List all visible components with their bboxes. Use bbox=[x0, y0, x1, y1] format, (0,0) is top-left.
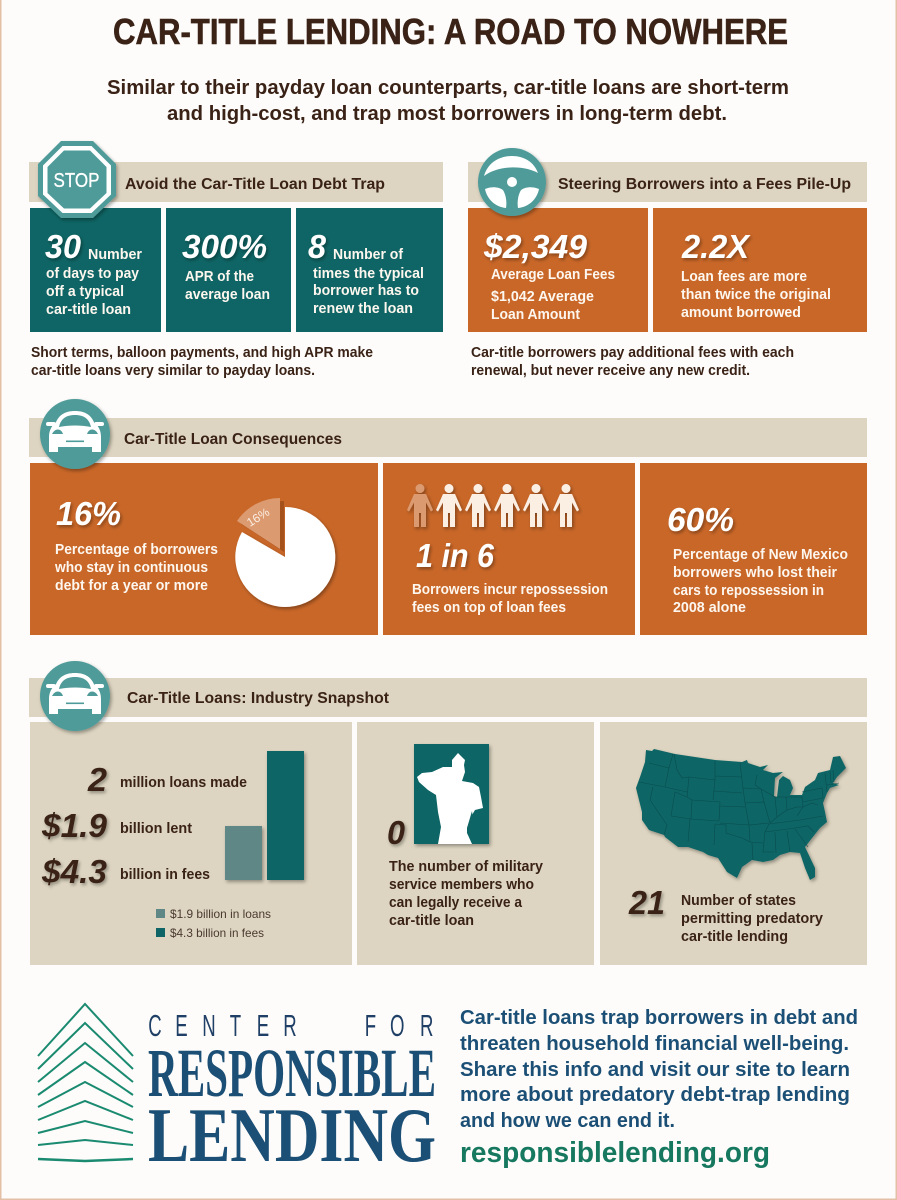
logo wordmark bbox=[148, 1009, 436, 1178]
logo: Center for Responsible Lending bbox=[38, 1004, 436, 1178]
chart legend: $1.9 billion in loans bbox=[170, 907, 271, 921]
bar chart bbox=[225, 751, 304, 880]
stat: 1.9 billion lent: $1.9 bbox=[41, 807, 108, 844]
stats card with bar chart bbox=[30, 722, 352, 965]
heading band: avoid the trap bbox=[29, 162, 443, 202]
stat: 2 million loans: 2 bbox=[87, 761, 108, 798]
note: short terms: car-title loans very similar to payday loans. bbox=[31, 363, 315, 379]
note: additional fees: Car-title borrowers pay additional fees with each bbox=[471, 345, 794, 361]
call to action text: Share this info and visit our site to learn bbox=[460, 1059, 850, 1081]
states caption: Number of states bbox=[681, 893, 796, 909]
stat box: average loan fees: Loan Amount bbox=[491, 307, 580, 323]
icon: stop sign bbox=[38, 141, 116, 218]
stat box: 8 renewals: Number of bbox=[333, 247, 403, 263]
note: short terms bbox=[31, 345, 373, 379]
icon: car badge, consequences bbox=[40, 399, 110, 469]
stat box: 2.2X: Loan fees are more bbox=[681, 269, 807, 285]
stat box: 8 renewals bbox=[296, 208, 443, 332]
subtitle: and high-cost, and trap most borrowers in long-term debt. bbox=[167, 102, 727, 125]
icon: steering wheel bbox=[478, 148, 546, 216]
states card bbox=[600, 722, 867, 965]
military caption: can legally receive a bbox=[389, 895, 523, 911]
stat box: 16 percent: Percentage of borrowers bbox=[55, 542, 218, 558]
stat box: 1 in 6: Borrowers incur repossession bbox=[412, 582, 608, 598]
stat box: 30 days: Number bbox=[88, 247, 142, 263]
panel: consequences bbox=[29, 399, 867, 635]
stat box: 16 percent: 16% bbox=[56, 495, 121, 532]
heading band: steering bbox=[468, 162, 867, 202]
states caption bbox=[681, 893, 823, 945]
stat box: 1 in 6: fees on top of loan fees bbox=[412, 600, 566, 616]
stat box: 8 renewals: borrower has to bbox=[313, 283, 419, 299]
military card: 0 bbox=[387, 814, 406, 851]
pie chart: 16 percent: 16% bbox=[244, 505, 272, 530]
panel: avoid the debt trap bbox=[29, 141, 443, 379]
stat: 1.9 billion lent bbox=[41, 807, 192, 844]
stat box: 60 percent: 60% bbox=[667, 501, 734, 538]
stat box: 60 percent: cars to repossession in bbox=[673, 583, 824, 599]
stat: 4.3 billion fees: $4.3 bbox=[41, 853, 107, 890]
states caption: car-title lending bbox=[681, 929, 788, 945]
note: additional fees: renewal, but never receive any new credit. bbox=[471, 363, 750, 379]
states caption: permitting predatory bbox=[681, 911, 823, 927]
states card: 21 bbox=[628, 884, 665, 921]
heading band: snapshot: Car-Title Loans: Industry Snapshot bbox=[127, 690, 390, 707]
call to action text: and how we can end it. bbox=[460, 1110, 675, 1132]
call to action text: threaten household financial well-being. bbox=[460, 1033, 849, 1055]
stat box: 60 percent bbox=[640, 463, 867, 635]
stat box: 30 days bbox=[30, 208, 161, 332]
military card bbox=[357, 722, 594, 965]
stat box: 300% APR: APR of the bbox=[185, 269, 254, 285]
military caption bbox=[389, 859, 543, 929]
stat box: 2.2X: amount borrowed bbox=[681, 305, 801, 321]
military caption: service members who bbox=[389, 877, 534, 893]
panel: industry snapshot bbox=[29, 661, 867, 965]
icon: chevron building bbox=[38, 1004, 133, 1161]
pie chart: 16 percent bbox=[235, 498, 335, 607]
call to action text: more about predatory debt-trap lending bbox=[460, 1084, 850, 1106]
stat box: 16 percent: who stay in continuous bbox=[54, 560, 208, 576]
logo wordmark: CENTER FOR bbox=[148, 1009, 433, 1043]
heading band: consequences: Car-Title Loan Consequences bbox=[124, 431, 342, 448]
call to action text bbox=[460, 1007, 858, 1132]
stat box: 300% APR: average loan bbox=[185, 287, 270, 303]
subtitle bbox=[107, 76, 789, 125]
icon: saluting soldier bbox=[414, 744, 489, 844]
stat box: 1 in 6: 1 in 6 bbox=[416, 537, 495, 574]
website link: responsiblelending.org bbox=[460, 1137, 770, 1169]
call to action text: Car-title loans trap borrowers in debt and bbox=[460, 1007, 858, 1029]
stat box: average loan fees: $2,349 bbox=[483, 228, 588, 265]
stat box: 30 days: off a typical bbox=[46, 284, 124, 300]
heading band: steering: Steering Borrowers into a Fees Pile-Up bbox=[558, 176, 851, 193]
icon: car badge, snapshot bbox=[40, 661, 110, 731]
stat box: average loan fees: Average Loan Fees bbox=[491, 267, 615, 283]
stat box: 60 percent: Percentage of New Mexico bbox=[673, 547, 848, 563]
map of the United States bbox=[636, 749, 846, 880]
stat box: 1 in 6 bbox=[383, 463, 635, 635]
stat box: 60 percent: borrowers who lost their bbox=[673, 565, 837, 581]
stat box: 300% APR: 300% bbox=[182, 228, 267, 265]
stat box: 30 days: 30 bbox=[45, 228, 82, 265]
stat box: 30 days: car-title loan bbox=[46, 302, 131, 318]
stat: 1.9 billion lent: billion lent bbox=[120, 821, 192, 837]
military caption: The number of military bbox=[389, 859, 543, 875]
icon: stop sign: STOP bbox=[54, 170, 100, 192]
stat box: 30 days: of days to pay bbox=[46, 266, 139, 282]
chart legend: $4.3 billion in fees bbox=[170, 926, 264, 940]
logo wordmark: LENDING bbox=[148, 1092, 436, 1178]
heading band: avoid the trap: Avoid the Car-Title Loan Debt Trap bbox=[125, 176, 385, 193]
stat: 4.3 billion fees: billion in fees bbox=[120, 867, 210, 883]
heading band: consequences bbox=[29, 418, 867, 457]
stat box: 8 renewals: 8 bbox=[308, 228, 327, 265]
stat box: 8 renewals: renew the loan bbox=[313, 301, 413, 317]
stat: 2 million loans bbox=[87, 761, 247, 798]
note: additional fees bbox=[471, 345, 794, 379]
title: CAR-TITLE LENDING: A ROAD TO NOWHERE bbox=[113, 11, 788, 52]
icon: six people, one highlighted bbox=[407, 484, 579, 527]
heading band: snapshot bbox=[29, 678, 867, 717]
note: short terms: Short terms, balloon payments, and high APR make bbox=[31, 345, 373, 361]
military caption: car-title loan bbox=[389, 913, 474, 929]
panel: steering borrowers bbox=[468, 148, 867, 379]
stat box: 2.2X bbox=[653, 208, 867, 332]
stat box: 60 percent: 2008 alone bbox=[673, 600, 746, 616]
stat box: 300% APR bbox=[166, 208, 291, 332]
stat box: average loan fees: $1,042 Average bbox=[491, 289, 594, 305]
logo wordmark: RESPONSIBLE bbox=[148, 1035, 436, 1111]
stat box: 2.2X: 2.2X bbox=[681, 228, 751, 265]
stat: 2 million loans: million loans made bbox=[120, 775, 247, 791]
stat box: 2.2X: than twice the original bbox=[681, 287, 831, 303]
stat box: 16 percent bbox=[30, 463, 378, 635]
stat box: 8 renewals: times the typical bbox=[313, 266, 424, 282]
stat box: 16 percent: debt for a year or more bbox=[55, 578, 208, 594]
subtitle: Similar to their payday loan counterparts, car-title loans are short-term bbox=[107, 76, 789, 99]
stat: 4.3 billion fees bbox=[41, 853, 210, 890]
stat box: average loan fees bbox=[468, 208, 648, 332]
chart legend bbox=[156, 907, 271, 940]
